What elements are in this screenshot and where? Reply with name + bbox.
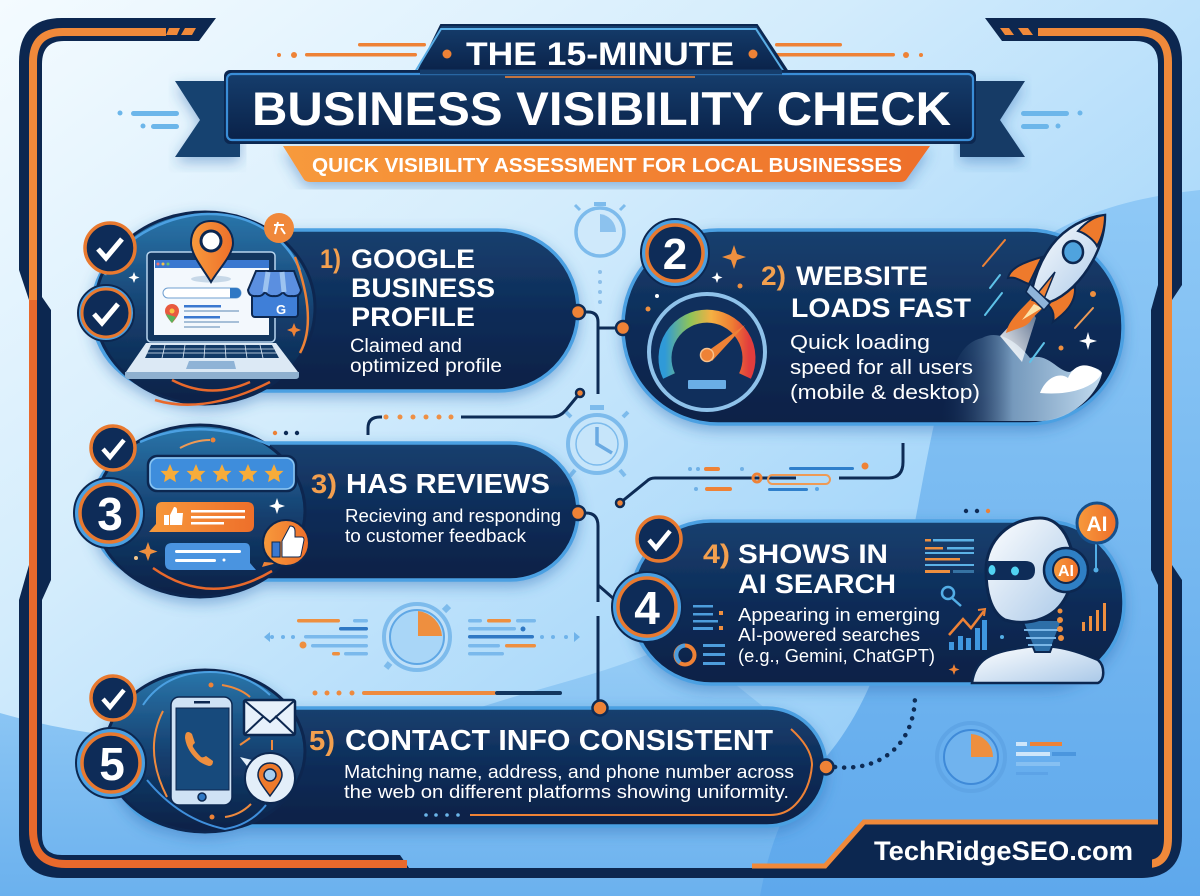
card 3 text: to customer feedback xyxy=(345,526,527,546)
icon: location bubble xyxy=(240,753,295,803)
card 1 text: Claimed and xyxy=(350,336,462,357)
icon: number 5 circle: 5 xyxy=(99,738,125,790)
card 2 text: Quick loading xyxy=(790,332,930,354)
card 3 pill xyxy=(92,425,578,597)
card 1 text: BUSINESS xyxy=(351,273,495,303)
card 4 text xyxy=(703,539,940,666)
card 4 pill xyxy=(631,521,1124,684)
connectors xyxy=(368,312,915,768)
rocket speed marks xyxy=(983,240,1093,362)
icon: number 4 circle: 4 xyxy=(634,582,660,634)
icon: envelope xyxy=(244,700,295,735)
card 2 text: 2) xyxy=(761,261,786,291)
top tab xyxy=(418,25,788,72)
card 5 pill xyxy=(105,670,826,832)
icon: orange badge xyxy=(264,213,294,243)
icon: stopwatch middle xyxy=(566,405,628,476)
card 3 text: HAS REVIEWS xyxy=(346,468,550,499)
card 2 text: (mobile & desktop) xyxy=(790,382,980,404)
card 2 text xyxy=(761,261,980,404)
card 1 text: optimized profile xyxy=(350,356,502,377)
icon: number 5 circle xyxy=(76,728,146,798)
icon: laptop xyxy=(125,252,299,379)
icon: storefront: G xyxy=(276,302,286,317)
icon: orange comment xyxy=(149,502,254,532)
icon: AI badge xyxy=(1077,503,1117,572)
card 3 text xyxy=(311,468,561,546)
icon: number 3 circle xyxy=(74,478,144,548)
icon: number 4 circle xyxy=(612,572,682,642)
decorative sparkles xyxy=(646,245,1096,350)
icon: bar chart small xyxy=(1082,603,1106,631)
panel: card 4 Shows in AI Search xyxy=(612,503,1124,684)
icon: magnifier xyxy=(942,587,961,606)
icon: number 2 circle xyxy=(641,219,709,287)
icon: check circle 2 xyxy=(78,285,134,341)
card 5 text: CONTACT INFO CONSISTENT xyxy=(345,725,773,757)
title line 2: BUSINESS VISIBILITY CHECK xyxy=(252,82,951,135)
card 1 text: 1) xyxy=(320,244,341,274)
icon: number 2 circle: 2 xyxy=(663,230,687,279)
icon: code lines xyxy=(925,539,974,573)
card 3 text: Recieving and responding xyxy=(345,506,561,526)
decorative dashes sides xyxy=(118,110,1082,129)
icon: check circle xyxy=(91,676,135,720)
card 3 text: 3) xyxy=(311,469,337,499)
connector dot card 3 xyxy=(571,506,585,520)
chart: clock with lines centre xyxy=(264,604,580,670)
connector dot top card 5 xyxy=(592,700,608,716)
icon: storefront xyxy=(248,271,301,317)
icon: check circle xyxy=(637,517,681,561)
title banner: QUICK VISIBILITY ASSESSMENT FOR LOCAL BUSINESSES xyxy=(312,155,902,177)
card 5 text: Matching name, address, and phone number across xyxy=(344,762,794,782)
icon: check circle 1 xyxy=(85,223,135,273)
card 2 text: speed for all users xyxy=(790,357,973,379)
panel: card 2 Website Loads Fast xyxy=(616,215,1123,424)
main banner xyxy=(224,70,976,144)
card 1 text xyxy=(320,244,502,377)
icon: star rating bar xyxy=(148,456,296,491)
card 4 text: AI-powered searches xyxy=(738,625,920,645)
card 4 text: Appearing in emerging xyxy=(738,605,940,625)
icon: blue comment xyxy=(165,543,256,570)
ribbon tails xyxy=(175,81,240,157)
icon: robot: AI xyxy=(1058,563,1074,580)
icon: map pin xyxy=(191,221,233,282)
card 2 pill xyxy=(623,230,1123,424)
card 2 text: WEBSITE xyxy=(796,261,928,291)
decorative title dashes left xyxy=(277,43,923,58)
connector dot card 2 xyxy=(616,321,630,335)
icon: AI badge: AI xyxy=(1086,513,1108,536)
icon: thumbs up badge xyxy=(262,520,309,567)
icon: check circle xyxy=(91,426,135,470)
card 4 text: AI SEARCH xyxy=(738,569,896,599)
card 4 text: SHOWS IN xyxy=(738,539,888,569)
icon: small stopwatch top xyxy=(575,202,625,256)
icon: number 3 circle: 3 xyxy=(97,488,123,540)
connector dot card 1 xyxy=(571,305,585,319)
icon: rocket xyxy=(1006,215,1105,333)
panel: card 1 Google Business Profile xyxy=(78,212,585,405)
panel: card 5 Contact Info Consistent xyxy=(76,670,834,832)
footer tab: TechRidgeSEO.com xyxy=(874,836,1133,866)
card 5 text: the web on different platforms showing uniformity. xyxy=(344,782,789,802)
card 1 text: GOOGLE xyxy=(351,244,475,274)
icon: growth chart xyxy=(948,609,1004,675)
title banner xyxy=(118,25,1082,182)
card 4 text: (e.g., Gemini, ChatGPT) xyxy=(738,646,935,666)
chart: clock with lines right xyxy=(937,723,1076,791)
icon: speed gauge xyxy=(649,294,765,410)
panel: card 3 Has Reviews xyxy=(74,425,585,597)
icon: smoke cloud xyxy=(940,306,1102,421)
card 5 text: 5) xyxy=(309,725,335,756)
card 1 pill xyxy=(92,212,578,404)
card 4 text: 4) xyxy=(703,539,730,569)
card 2 text: LOADS FAST xyxy=(791,293,972,323)
footer tab xyxy=(752,822,1158,868)
icon: smartphone xyxy=(171,697,232,805)
icon: list lines xyxy=(676,605,725,665)
subtitle ribbon xyxy=(283,146,930,182)
title line 1: THE 15-MINUTE xyxy=(466,36,734,72)
card 5 text xyxy=(309,725,794,802)
card 1 text: PROFILE xyxy=(351,302,475,332)
small dots and dashes near connectors xyxy=(273,270,990,696)
connector dot right card 5 xyxy=(818,760,834,774)
icon: robot xyxy=(972,518,1103,683)
